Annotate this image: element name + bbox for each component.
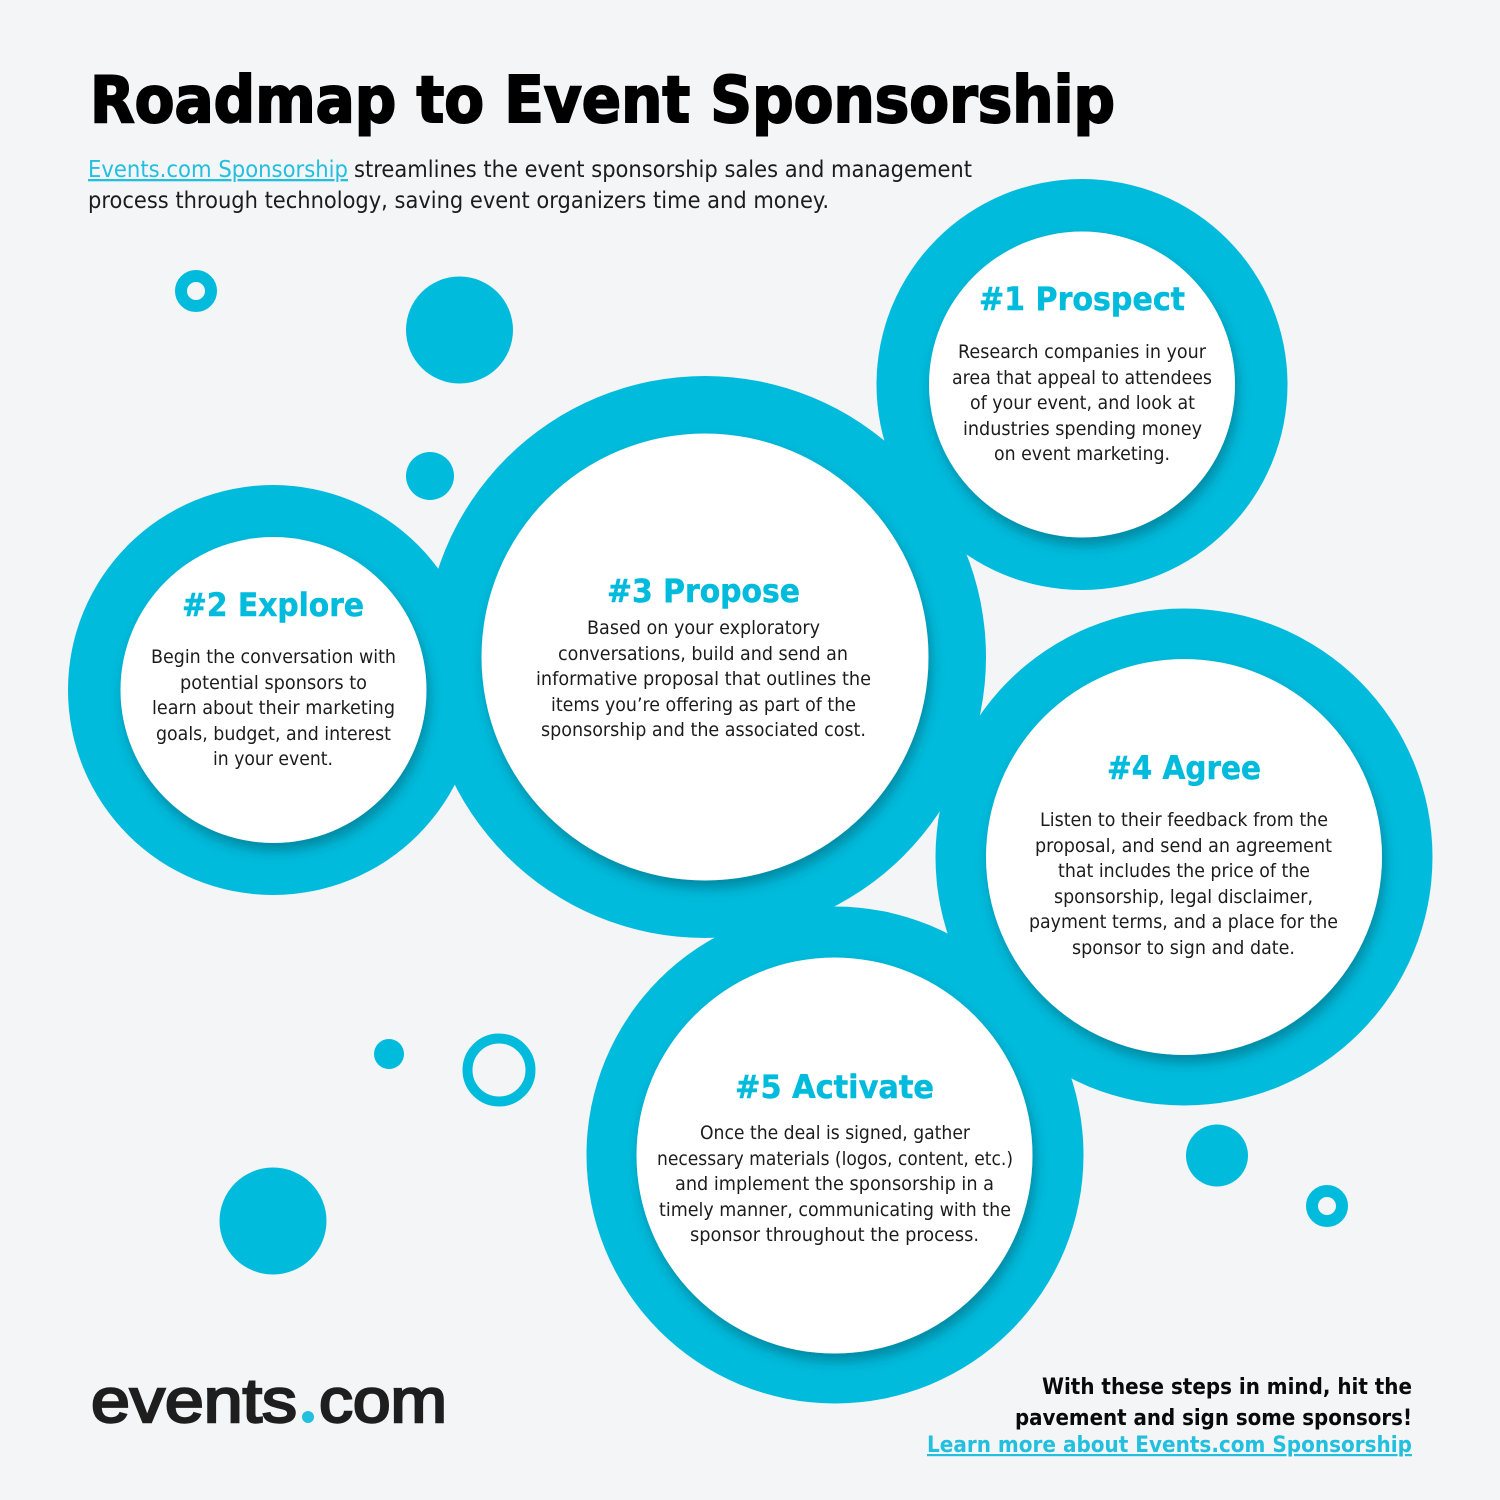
panel: step 5 activate: and implement the sponsorship in a (675, 1173, 994, 1195)
intro text: process through technology, saving event organizers time and money. (88, 188, 829, 214)
panel: step 4 agree: that includes the price of the (1058, 860, 1310, 882)
closing call to action: pavement and sign some sponsors! (1015, 1406, 1412, 1431)
decorative bubbles (181, 276, 1342, 1274)
panel: step 4 agree: sponsorship, legal disclaimer, (1054, 886, 1313, 908)
intro text: Events.com Sponsorship (88, 157, 348, 183)
panel: step 2 explore: #2 Explore (182, 586, 364, 624)
logo: events.com (91, 1367, 447, 1436)
panel: step 2 explore: learn about their marketing (152, 697, 395, 719)
panel: step 4 agree: Listen to their feedback from the (1040, 809, 1328, 831)
panel: step 3 propose: sponsorship and the associated cost. (541, 719, 866, 741)
intro text (88, 157, 972, 214)
panel: step 1 prospect: area that appeal to attendees (952, 367, 1212, 389)
logo: events.com: com (319, 1367, 447, 1436)
panel: step 5 activate: timely manner, communicating with the (659, 1199, 1011, 1221)
panel: step 3 propose: Based on your exploratory (587, 617, 820, 639)
panel: step 1 prospect: #1 Prospect (979, 280, 1185, 318)
closing call to action (927, 1375, 1412, 1458)
panel: step 2 explore: Begin the conversation with (151, 646, 396, 668)
panel: step 3 propose: #3 Propose (607, 572, 800, 610)
panel: step 3 propose: informative proposal that outlines the (536, 668, 871, 690)
panel: step 5 activate (636, 958, 1032, 1354)
panel: step 3 propose: conversations, build and send an (558, 643, 848, 665)
panel: step 1 prospect: of your event, and look at (970, 392, 1195, 414)
panel: step 2 explore: goals, budget, and interest (156, 723, 391, 745)
logo: events.com: events (91, 1367, 297, 1436)
panel: step 2 explore: in your event. (213, 748, 333, 770)
panel: step 5 activate: necessary materials (logos, content, etc.) (657, 1148, 1013, 1170)
panel: step 5 activate: sponsor throughout the process. (690, 1224, 979, 1246)
panel: step 4 agree: proposal, and send an agreement (1035, 835, 1332, 857)
panel: step 3 propose: items you’re offering as part of the (551, 694, 856, 716)
panel: step 4 agree: payment terms, and a place for the (1029, 911, 1338, 933)
panel: step 1 prospect: industries spending money (963, 418, 1202, 440)
intro text: streamlines the event sponsorship sales and management (354, 157, 972, 183)
panel: step 4 agree: sponsor to sign and date. (1072, 937, 1295, 959)
panel: step 5 activate: #5 Activate (735, 1068, 934, 1106)
panel: step 1 prospect: on event marketing. (994, 443, 1170, 465)
panel: step 5 activate: Once the deal is signed, gather (700, 1122, 970, 1144)
panel: step 1 prospect: Research companies in your (958, 341, 1206, 363)
panel: step 2 explore (120, 537, 426, 843)
panel: step 3 propose (482, 434, 928, 880)
panel: step 2 explore: potential sponsors to (180, 672, 367, 694)
closing call to action: With these steps in mind, hit the (1042, 1375, 1412, 1400)
title: Roadmap to Event Sponsorship (90, 64, 1115, 138)
panel: step 4 agree: #4 Agree (1107, 749, 1261, 787)
closing call to action: Learn more about Events.com Sponsorship (927, 1433, 1412, 1458)
panel: step 4 agree (986, 659, 1382, 1055)
circle rings (68, 179, 1432, 1404)
panel: step 1 prospect (929, 232, 1235, 538)
